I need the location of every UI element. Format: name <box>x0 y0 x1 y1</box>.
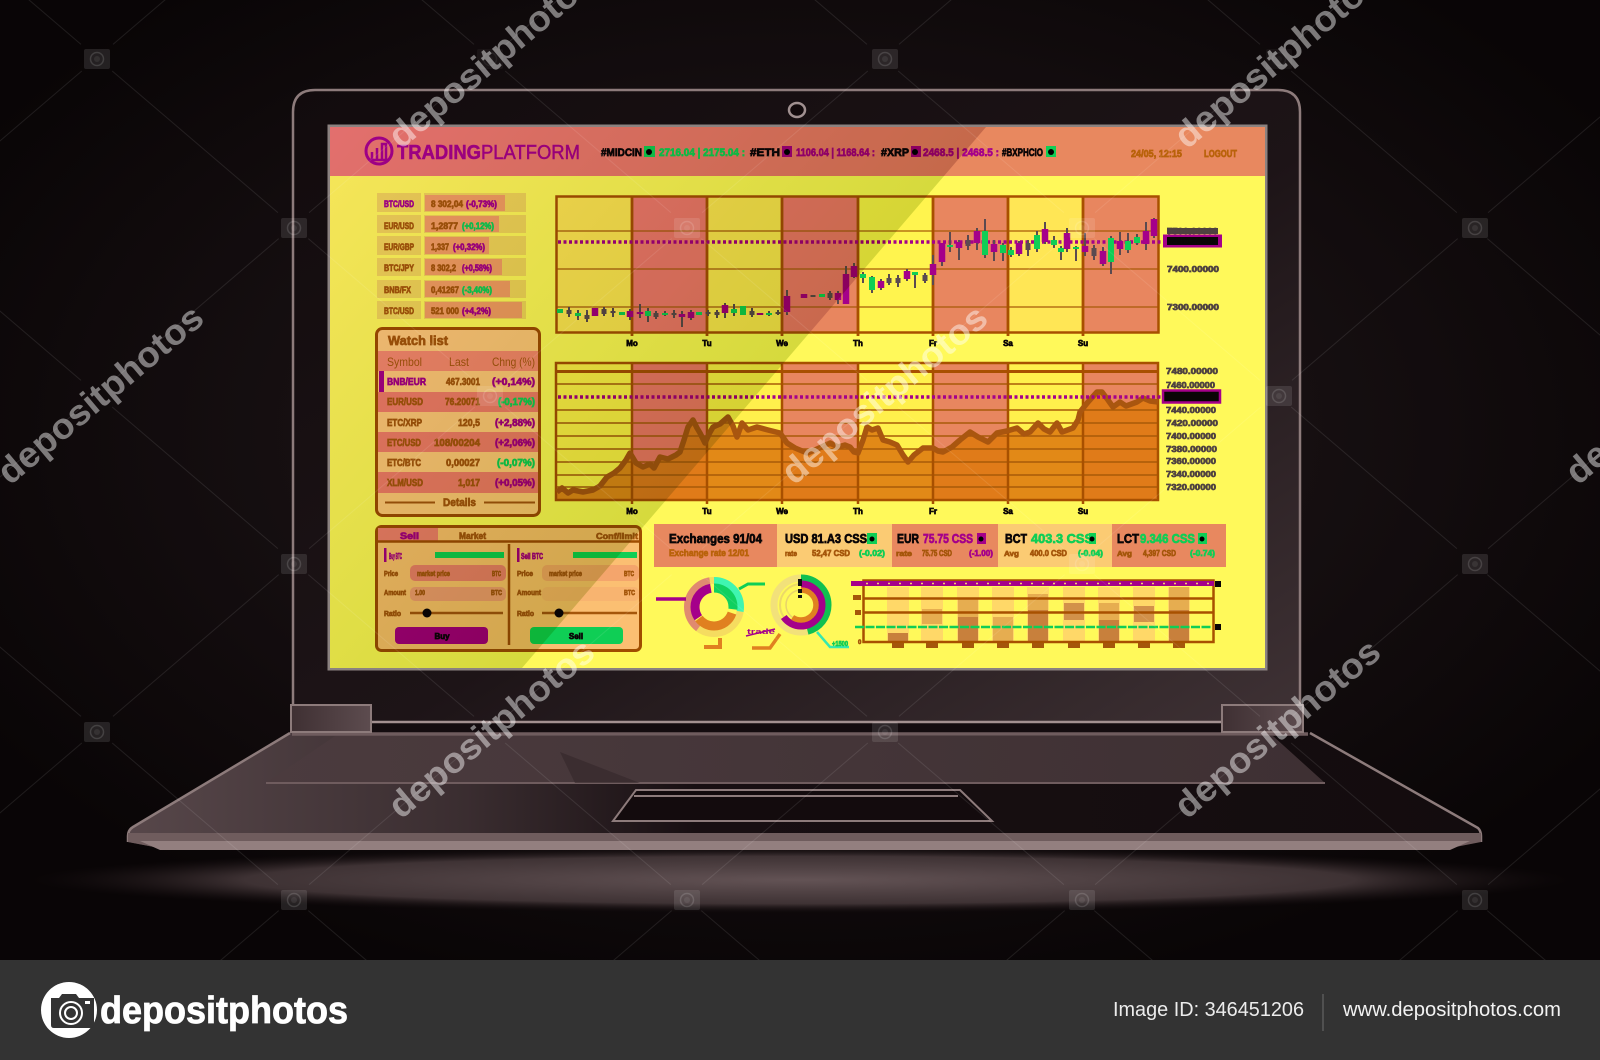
watermark text <box>0 0 1600 826</box>
footer logo text: depositphotos <box>100 990 348 1032</box>
exchange cards <box>654 524 1226 567</box>
bar chart <box>851 580 1221 648</box>
ticker list: BNB/FX <box>384 285 411 295</box>
watch list text: 76.20071 <box>445 397 480 408</box>
image id: Image ID: 346451206 <box>1113 999 1304 1021</box>
watermark text: depositphotos <box>1166 630 1388 826</box>
price scale: 7400.00000 <box>1166 431 1216 441</box>
lct card <box>1117 531 1215 558</box>
ticker strip: #ETH <box>750 147 780 159</box>
price scale: 7300.00000 <box>1167 303 1220 312</box>
day labels: Th <box>853 339 863 348</box>
watch list panel <box>376 328 540 516</box>
right hinge <box>1222 705 1303 732</box>
watch list text: 120,5 <box>458 418 480 429</box>
watermark text: depositphotos <box>380 630 602 826</box>
order panel <box>376 526 640 650</box>
price marker line <box>558 395 1162 399</box>
day labels: We <box>776 339 788 348</box>
footer bar <box>0 960 1600 1060</box>
date and logout: 24/05, 12:15 <box>1131 149 1182 160</box>
donut one leader lines <box>656 584 765 647</box>
watch list text: EUR/USD <box>387 397 423 408</box>
order tabs: Conf/limit <box>596 531 638 541</box>
day labels: Tu <box>702 507 712 516</box>
usd card: USD 81.A3 CSS <box>785 531 867 546</box>
watch list text: 467.3001 <box>446 377 480 388</box>
date and logout <box>1131 149 1237 160</box>
ticker list: 1,2877 <box>431 221 458 231</box>
price scale: 7480.00000 <box>1166 366 1218 376</box>
day labels: Su <box>1078 507 1088 516</box>
ticker strip: #XRP <box>881 147 909 159</box>
watch list text: ETC/BTC <box>387 458 421 469</box>
usd card: (-0.02) <box>859 548 885 558</box>
screen header bar <box>330 127 1265 176</box>
sell button <box>530 627 623 644</box>
day labels: Sa <box>1003 339 1013 348</box>
magenta candle bodies <box>595 219 1154 318</box>
chart columns <box>556 196 1159 333</box>
exchange title: Exchanges 91/04 <box>669 531 763 546</box>
lct card: 4,397 CSD <box>1143 548 1176 558</box>
watch list text: Chng (%) <box>492 355 535 369</box>
ticker strip <box>601 146 1056 159</box>
ticker list: EUR/USD <box>384 221 414 231</box>
watch list rows <box>378 351 538 493</box>
sell column: Ratio <box>517 611 534 618</box>
donut chart one <box>656 580 765 647</box>
price scale: 7380.00000 <box>1166 444 1217 454</box>
ticker strip: #BXPHCIO <box>1002 147 1043 159</box>
candle wicks <box>569 218 1154 327</box>
exchange title <box>669 531 763 558</box>
watermark text: depositphotos <box>773 296 995 492</box>
watch list text: (+0,14%) <box>492 377 535 388</box>
watch list text: (+2,88%) <box>495 418 535 429</box>
logo text: TRADINGPLATFORM <box>397 142 580 164</box>
website url: www.depositphotos.com <box>1342 999 1561 1021</box>
day labels: Th <box>853 507 863 516</box>
donut two leader lines <box>746 629 849 648</box>
watch list text: 0,00027 <box>446 458 480 469</box>
bct card: (-0.04) <box>1078 548 1103 558</box>
logo icon <box>366 138 392 164</box>
day labels: We <box>776 507 788 516</box>
buy column: Price <box>384 571 398 578</box>
buy column: BTC <box>491 590 502 597</box>
buy column: Buy BTC <box>389 552 402 561</box>
front edge <box>128 833 1481 850</box>
ticker list: (+4,2%) <box>462 306 491 316</box>
eur card: rate <box>896 549 912 558</box>
details link: Details <box>443 497 476 509</box>
right markers <box>1215 581 1221 630</box>
candlestick chart <box>556 196 1222 348</box>
watch list text <box>387 355 535 489</box>
watch list text: ETC/USD <box>387 438 421 449</box>
lct card: 9.346 CSS <box>1140 531 1195 546</box>
eur card <box>896 531 993 558</box>
exchange title: Exchange rate 12/01 <box>669 548 749 558</box>
donut chart two <box>746 578 849 648</box>
watch list text: 1,017 <box>458 478 480 489</box>
sell column: Amount <box>517 590 542 597</box>
sell column: market price <box>549 571 582 578</box>
ticker list: 1,337 <box>431 242 449 252</box>
ticker list: 8 302,2 <box>431 263 456 273</box>
buy button <box>395 627 488 644</box>
price area <box>555 392 1158 501</box>
buy column <box>384 548 506 644</box>
lct card: LCT <box>1117 531 1139 546</box>
price scale <box>1163 366 1220 492</box>
grey candle bodies <box>569 240 1094 319</box>
chart frame <box>863 598 1214 612</box>
trackpad <box>613 790 992 821</box>
lct card: (-0.74) <box>1190 548 1215 558</box>
usd card: 52,47 CSD <box>812 548 850 558</box>
ticker list: (-0,73%) <box>466 199 497 209</box>
day labels: Sa <box>1003 507 1013 516</box>
order tabs <box>377 528 640 542</box>
sell column: Sell BTC <box>521 552 543 561</box>
y axis labels <box>853 595 862 646</box>
watch list title: Watch list <box>388 333 449 348</box>
eur card: 75.75 CSS <box>923 531 973 546</box>
sell column: BTC <box>624 590 635 597</box>
x axis labels <box>892 643 1185 648</box>
buy column: BTC <box>492 571 501 578</box>
price scale: 7420.00000 <box>1166 418 1218 428</box>
price line <box>557 392 1158 493</box>
bct card: Avg <box>1004 549 1019 558</box>
price scale: 7440.24000 <box>1167 237 1219 246</box>
day labels: Fr <box>929 339 937 348</box>
ticker list: EUR/GBP <box>384 242 414 252</box>
day labels <box>626 507 1088 516</box>
buy column: Amount <box>384 590 407 597</box>
price scale: 7360.00000 <box>1166 456 1216 466</box>
price scale: 7440.00000 <box>1166 405 1216 415</box>
ticker strip: 1106.04 | 1168.64 : <box>796 147 875 159</box>
usd card <box>785 531 885 558</box>
ticker list: (+0,32%) <box>453 242 485 252</box>
left hinge <box>291 705 371 732</box>
mid bar segments <box>922 587 1189 641</box>
day labels: Fr <box>929 507 937 516</box>
day labels: Su <box>1078 339 1088 348</box>
price scale: 7340.00000 <box>1166 469 1216 479</box>
watermark camera icons <box>84 49 1488 910</box>
day labels: Mo <box>626 507 638 516</box>
order tabs: Market <box>459 531 486 541</box>
price scale: 7320.00000 <box>1166 482 1216 492</box>
eur card: (-1.00) <box>969 548 993 558</box>
watch list text: (-0,07%) <box>497 458 535 469</box>
watch list text: Symbol <box>387 355 422 369</box>
sell column: BTC <box>624 571 634 578</box>
bct card: 400.0 CSD <box>1030 548 1067 558</box>
eur card: 75.75 CSD <box>922 548 952 558</box>
green limit line <box>855 626 1212 628</box>
ticker list <box>377 193 526 319</box>
ticker list: (-3,40%) <box>462 285 492 295</box>
buy column: market price <box>417 571 450 578</box>
watch list text: (+2,06%) <box>495 438 535 449</box>
watch list text: XLM/USD <box>387 478 423 489</box>
day labels <box>626 339 1088 348</box>
day labels: Tu <box>702 339 712 348</box>
sell column <box>517 548 639 644</box>
ticker strip: 2468.5 | 2468.5 : <box>923 147 999 159</box>
pale bars <box>887 587 1190 641</box>
price scale: 7500.00000 <box>1167 227 1219 236</box>
buy column: Buy <box>434 632 450 641</box>
screen <box>328 124 1268 670</box>
ticker list: (+0,58%) <box>462 263 492 273</box>
watch list text: (-0,17%) <box>498 397 535 408</box>
price marker line <box>558 240 1162 244</box>
bct card: 403.3 CSS <box>1031 531 1093 546</box>
footer logo icon <box>41 982 97 1038</box>
sell column: Sell <box>569 632 583 641</box>
order tabs: Sell <box>400 531 419 541</box>
keyboard deck <box>266 736 1325 783</box>
ticker list: 521 000 <box>431 306 459 316</box>
date and logout: LOGOUT <box>1204 149 1237 160</box>
buy column: Ratio <box>384 611 401 618</box>
watch list text: (+0,05%) <box>495 478 535 489</box>
laptop lid <box>293 90 1300 725</box>
ticker list: 0,41267 <box>431 285 459 295</box>
watch list text: BNB/EUR <box>387 377 427 388</box>
ticker list: BTC/JPY <box>384 263 414 273</box>
magenta limit strip <box>851 581 1214 586</box>
ticker list: BTC/USD <box>384 199 414 209</box>
donut two leader lines: trade <box>747 629 775 636</box>
sell column: Price <box>517 571 533 578</box>
buy column: 1.00 <box>415 590 425 597</box>
dark bar segments <box>888 610 1189 641</box>
eur card: EUR <box>897 531 919 546</box>
ticker list: BTC/USD <box>384 306 414 316</box>
y axis labels: 0 <box>858 640 862 646</box>
donut two leader lines: +1500 <box>832 641 848 648</box>
lct card: Avg <box>1117 549 1132 558</box>
watch list text: Last <box>449 355 470 369</box>
green candle bodies <box>560 231 1137 316</box>
area line chart <box>555 362 1220 516</box>
price scale: 7400.00000 <box>1167 265 1220 274</box>
laptop base <box>128 705 1481 850</box>
watch list text: 108/00204 <box>434 438 480 449</box>
bct card <box>1004 531 1103 558</box>
ticker strip: #MIDCIN <box>601 147 642 159</box>
ticker strip: 2716.04 | 2175.04 : <box>659 147 745 159</box>
webcam <box>789 103 805 117</box>
ticker list: 8 302,04 <box>431 199 463 209</box>
laptop reflection <box>30 847 1570 913</box>
day labels: Mo <box>626 339 638 348</box>
price scale <box>1163 227 1222 312</box>
price scale: 7460.00000 <box>1166 380 1215 390</box>
chart columns <box>555 362 1159 501</box>
bct card: BCT <box>1005 531 1027 546</box>
screen light diagonal shading <box>330 127 986 668</box>
watch list text: ETC/XRP <box>387 418 422 429</box>
usd card: rate <box>785 549 797 558</box>
ticker list: (+0,12%) <box>462 221 494 231</box>
